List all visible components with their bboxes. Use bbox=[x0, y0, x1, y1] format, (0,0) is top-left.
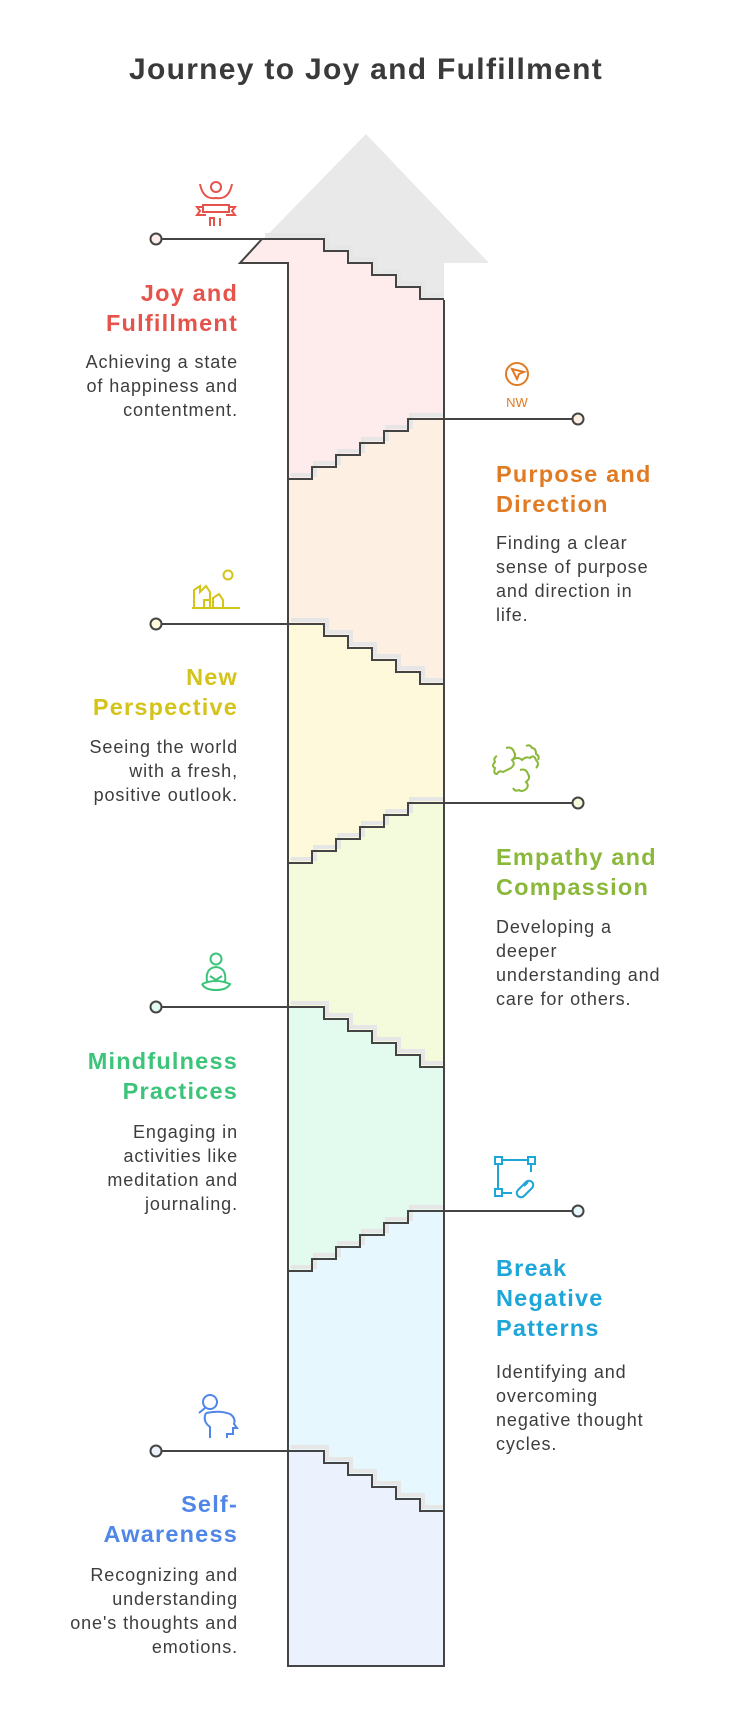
icon: empathy hands bbox=[493, 745, 539, 791]
icon: self-awareness head bbox=[199, 1395, 237, 1438]
band: break bbox=[288, 1211, 444, 1511]
band: self bbox=[288, 1451, 444, 1666]
text: self-awareness: understanding bbox=[112, 1589, 238, 1609]
text: empathy and compassion: understanding and bbox=[496, 965, 660, 985]
text: joy and fulfillment: Joy and bbox=[141, 280, 238, 306]
text: empathy and compassion: deeper bbox=[496, 941, 557, 961]
band: empathy bbox=[288, 803, 444, 1067]
text: empathy and compassion: Empathy and bbox=[496, 844, 657, 870]
icon: meditating person bbox=[202, 954, 230, 990]
icon: new perspective landscape bbox=[192, 570, 240, 608]
text: break negative patterns: negative thought bbox=[496, 1410, 644, 1430]
text: purpose and direction bbox=[496, 461, 652, 625]
text: mindfulness practices: activities like bbox=[123, 1146, 238, 1166]
text: self-awareness: Self- bbox=[181, 1491, 238, 1517]
text: break negative patterns: cycles. bbox=[496, 1434, 557, 1454]
text: empathy and compassion: Compassion bbox=[496, 874, 649, 900]
band: purpose bbox=[288, 419, 444, 684]
text: break negative patterns: Negative bbox=[496, 1285, 604, 1311]
text: empathy and compassion bbox=[496, 844, 660, 1009]
icon: compass NW: NW bbox=[506, 395, 529, 410]
text: new perspective: Perspective bbox=[93, 694, 238, 720]
text: self-awareness: Awareness bbox=[104, 1521, 238, 1547]
text: purpose and direction: life. bbox=[496, 605, 529, 625]
text: purpose and direction: and direction in bbox=[496, 581, 632, 601]
text: self-awareness: Recognizing and bbox=[90, 1565, 238, 1585]
text: mindfulness practices: meditation and bbox=[107, 1170, 238, 1190]
text: mindfulness practices: journaling. bbox=[144, 1194, 238, 1214]
arrow staircase bbox=[150, 134, 584, 1666]
text: new perspective: Seeing the world bbox=[90, 737, 238, 757]
icon: broken chain link bbox=[495, 1157, 535, 1197]
text: mindfulness practices: Practices bbox=[123, 1078, 238, 1104]
text: purpose and direction: Finding a clear bbox=[496, 533, 628, 553]
text: break negative patterns: overcoming bbox=[496, 1386, 598, 1406]
icon: joy person with banner bbox=[197, 182, 235, 226]
text: self-awareness bbox=[70, 1491, 238, 1657]
text: new perspective: New bbox=[186, 664, 238, 690]
text: joy and fulfillment: Fulfillment bbox=[106, 310, 238, 336]
text: mindfulness practices bbox=[88, 1048, 238, 1214]
band: joy bbox=[240, 239, 444, 479]
text: new perspective bbox=[90, 664, 238, 805]
text: empathy and compassion: care for others. bbox=[496, 989, 631, 1009]
icon: compass NW bbox=[506, 363, 529, 410]
band: mindfulness bbox=[288, 1007, 444, 1271]
text: new perspective: with a fresh, bbox=[128, 761, 238, 781]
text: joy and fulfillment: Achieving a state bbox=[86, 352, 238, 372]
text: break negative patterns: Patterns bbox=[496, 1315, 600, 1341]
text: break negative patterns bbox=[496, 1255, 644, 1454]
text: break negative patterns: Break bbox=[496, 1255, 567, 1281]
text: purpose and direction: sense of purpose bbox=[496, 557, 648, 577]
text: purpose and direction: Purpose and bbox=[496, 461, 652, 487]
text: purpose and direction: Direction bbox=[496, 491, 609, 517]
text: empathy and compassion: Developing a bbox=[496, 917, 612, 937]
text: mindfulness practices: Engaging in bbox=[133, 1122, 238, 1142]
text: break negative patterns: Identifying and bbox=[496, 1362, 627, 1382]
text: joy and fulfillment: of happiness and bbox=[86, 376, 238, 396]
text: self-awareness: emotions. bbox=[152, 1637, 238, 1657]
title: Journey to Joy and Fulfillment bbox=[129, 53, 603, 86]
text: joy and fulfillment: contentment. bbox=[123, 400, 238, 420]
text: mindfulness practices: Mindfulness bbox=[88, 1048, 238, 1074]
text: self-awareness: one's thoughts and bbox=[70, 1613, 238, 1633]
band: new perspective bbox=[288, 624, 444, 863]
text: joy and fulfillment bbox=[86, 280, 238, 420]
text: new perspective: positive outlook. bbox=[94, 785, 238, 805]
